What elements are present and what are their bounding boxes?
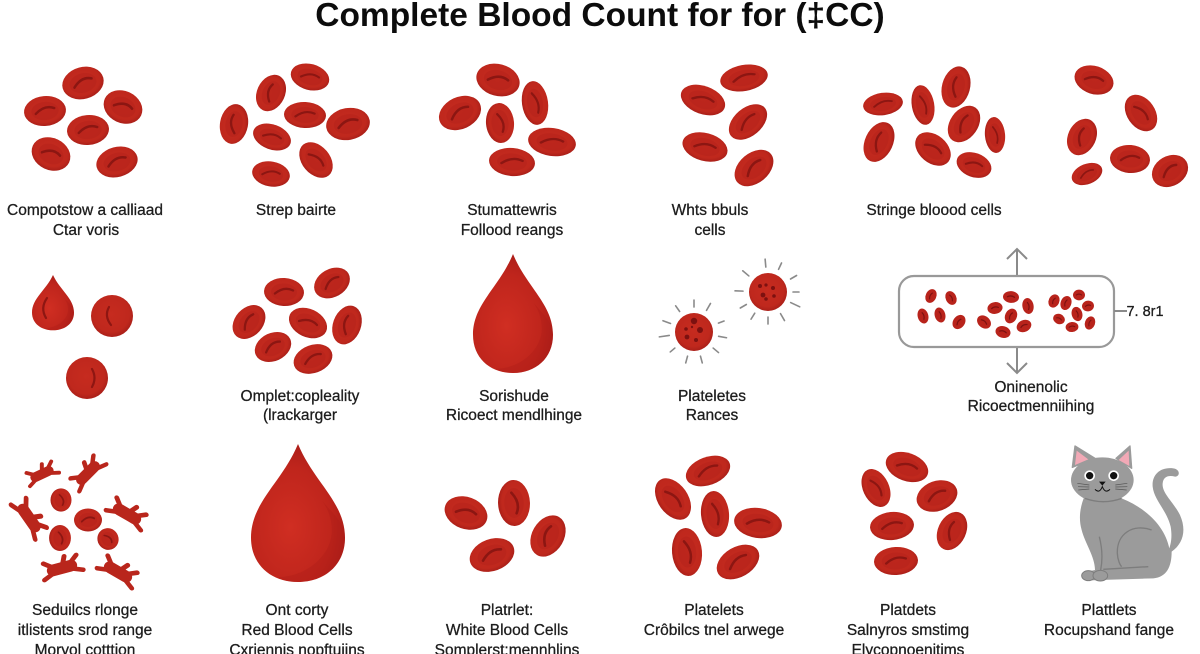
label: Ont corty: [266, 602, 329, 619]
round cell: [66, 357, 108, 399]
label: Follood reangs: [461, 222, 564, 239]
panel: row 1 column 4: [672, 61, 780, 239]
label: Red Blood Cells: [241, 622, 353, 639]
label: Strep bairte: [256, 202, 336, 219]
red cell cluster: [1061, 61, 1194, 193]
red cell cluster: [440, 479, 573, 578]
icon: platelet upper: [735, 259, 800, 324]
label: Ricoect mendlhinge: [446, 407, 582, 424]
panel: row 1 column 5: [857, 63, 1007, 219]
round cell: [91, 295, 133, 337]
panel: reference range box: [899, 249, 1164, 415]
panel: row 2 column 2: [226, 261, 367, 424]
label: Crôbilcs tnel arwege: [644, 622, 784, 639]
tick line to value: [1114, 310, 1127, 312]
panel: row 3 column 5: [847, 446, 973, 654]
panel: row 3 column 2: [229, 444, 365, 654]
panel: row 1 column 3: [433, 59, 578, 239]
label: Compotstow a calliaad: [7, 202, 163, 219]
label: (lrackarger: [263, 407, 337, 424]
panel: row 1 column 6: [1061, 61, 1194, 193]
irregular cells: [11, 452, 150, 588]
red cell cluster: [226, 261, 367, 379]
panel: row 3 column 4: [644, 450, 784, 639]
label: Platelets: [684, 602, 744, 619]
panel: row 3 column 3: [435, 479, 580, 654]
label: Oninenolic: [994, 379, 1068, 396]
label: Plateletes: [678, 388, 746, 405]
label: Rances: [686, 407, 739, 424]
label: White Blood Cells: [446, 622, 568, 639]
sample box: [899, 276, 1114, 347]
icon: platelet lower: [659, 300, 726, 363]
icon: large blood drop: [251, 444, 345, 582]
cells in sample box: [916, 287, 1097, 340]
label: Stumattewris: [467, 202, 557, 219]
label: Sorishude: [479, 388, 549, 405]
red cell cluster: [856, 446, 973, 576]
label: itlistents srod range: [18, 622, 152, 639]
label: Platdets: [880, 602, 936, 619]
label: Omplet:copleality: [241, 388, 360, 405]
panel: row 2 column 3: [446, 254, 582, 424]
red cell cluster: [433, 59, 578, 178]
arrow: down: [1007, 347, 1027, 373]
panel: row 2 drop and cells: [32, 275, 133, 399]
panel: cat: [1044, 446, 1183, 639]
round cells: [49, 488, 123, 554]
red cell cluster: [857, 63, 1007, 182]
label: Plattlets: [1081, 602, 1137, 619]
label: Salnyros smstimg: [847, 622, 969, 639]
label: Rocupshand fange: [1044, 622, 1174, 639]
panel: row 1 column 1: [7, 62, 163, 239]
arrow: up: [1007, 249, 1027, 275]
icon: grey cat: [1071, 446, 1183, 581]
panel: row 1 column 2: [217, 59, 372, 219]
value: 7. 8r1: [1126, 304, 1164, 320]
red cell cluster: [677, 61, 780, 194]
red cell cluster: [217, 59, 372, 190]
red cell cluster: [23, 62, 148, 182]
icon: blood drop: [473, 254, 553, 373]
label: Ctar voris: [53, 222, 119, 239]
red cell cluster: [648, 450, 784, 586]
panel: platelets: [659, 259, 800, 424]
icon: small blood drop: [32, 275, 74, 330]
label: Whts bbuls: [672, 202, 749, 219]
label: Ricoectmenniihing: [968, 398, 1094, 415]
label: cells: [694, 222, 726, 239]
label: Platrlet:: [481, 602, 533, 619]
label: Seduilcs rlonge: [32, 602, 138, 619]
label: Stringe bloood cells: [866, 202, 1002, 219]
panel: row 3 column 1: [11, 452, 152, 654]
